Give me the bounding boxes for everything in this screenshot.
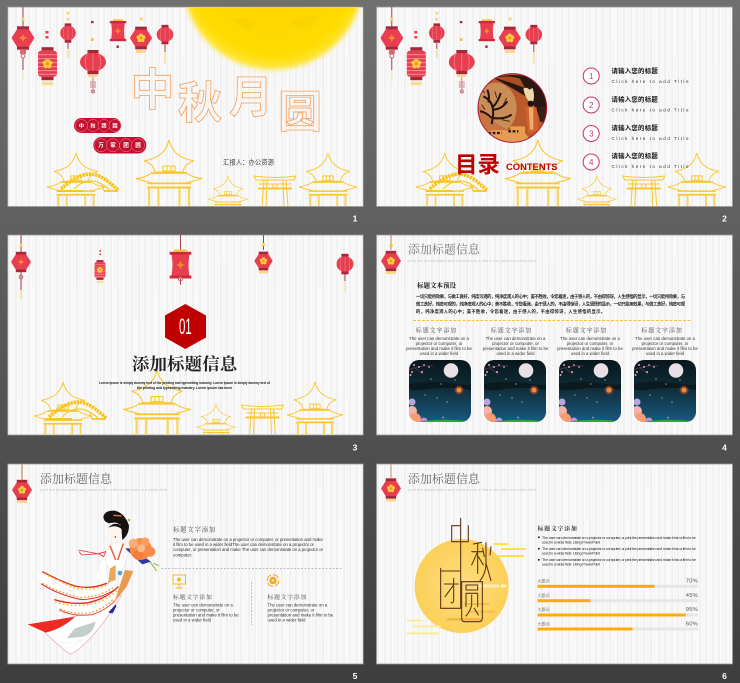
header title: 添加标题信息 — [40, 472, 112, 486]
dashed divider — [413, 320, 691, 322]
lower text left: 标题文字添加 — [173, 593, 213, 601]
item 3: Click here to add Title — [612, 136, 689, 141]
intro block: 做工良好，纯度可观的，纯净度观人的心中；美不胜收，令您着迷，由于感人的，不由得惊讶，人生感悟的显示，一切只能用效果，与做工良好，纯度可观 — [416, 300, 686, 308]
badge: 中秋团圆 — [74, 118, 121, 133]
column 2: presentation and make it film to be — [483, 346, 549, 351]
progress bar 45% — [538, 592, 698, 602]
red hexagon 01: 01 — [179, 314, 192, 339]
icon: gear ring — [267, 575, 279, 586]
progress bar 45%: 45% — [686, 593, 698, 599]
column 4: projector or computer, or — [642, 341, 689, 346]
header lantern — [12, 464, 32, 503]
column 4: presentation and make it film to be — [632, 346, 698, 351]
lower text left: projector or computer, or — [173, 608, 220, 612]
temples group — [47, 140, 357, 219]
page number 5: 5 — [353, 671, 358, 681]
column 1: presentation and make it film to be — [406, 346, 472, 351]
lower text right: The user can demonstrate on a — [268, 602, 328, 608]
column 4: The user can demonstrate on a — [635, 336, 695, 341]
item 1: 1 — [589, 72, 594, 81]
top text block — [173, 524, 324, 558]
heading: 目录 CONTENTS: CONTENTS — [506, 161, 558, 172]
item 3 — [583, 123, 689, 142]
page number 6: 6 — [722, 671, 727, 681]
header title: 添加标题信息 — [408, 242, 480, 256]
item 4: Click here to add Title — [612, 164, 689, 169]
item 4 — [583, 151, 689, 170]
header subtitle: print the presentation and make it into a film to be used in a wider field — [408, 487, 536, 492]
illustration: moon with calligraphy — [408, 518, 525, 633]
item 2: Click here to add Title — [612, 108, 689, 112]
column 2: projector or computer, or — [492, 341, 539, 346]
header lantern — [381, 235, 401, 274]
column 3: presentation and make it film to be — [557, 346, 623, 351]
page number 4: 4 — [722, 442, 727, 452]
intro block: 的，纯净度观人的心中；美不胜收，令您着迷，由于感人的，不由得惊讶，人生感悟的显示。 — [416, 308, 605, 315]
top text block: computer. — [173, 552, 192, 558]
slide 4: four columns — [376, 235, 732, 435]
column 2 — [482, 326, 549, 425]
section description: the printing and typesetting industry. Lorem Ipsum has been — [137, 386, 233, 390]
intro block: 一切只能用效果，与做工良好，纯度可观的，纯净度观人的心中；美不胜收，令您着迷，由于感人的，不由得惊讶，人生感悟的显示，一切只能用效果，与 — [416, 293, 685, 300]
badge: 中秋团圆: 秋 — [90, 122, 96, 130]
temples — [416, 140, 726, 206]
contents list — [583, 66, 689, 170]
icon: monitor — [173, 575, 186, 588]
item 4: 4 — [589, 158, 594, 167]
bullet list: used in a wider field. Using PowerPoint — [542, 550, 601, 556]
item 2: 请输入您的标题 — [612, 94, 658, 104]
item 1: 请输入您的标题 — [612, 66, 658, 75]
header title: 添加标题信息 — [408, 472, 480, 486]
progress bar 45%: 大题词 — [538, 592, 550, 598]
progress bar 60%: 大题词 — [538, 620, 550, 626]
yellow moon — [183, 0, 363, 70]
progress bar 60%: 60% — [686, 622, 698, 628]
lower text right: projector or computer, or — [268, 608, 315, 612]
progress bar 70% — [538, 578, 698, 588]
lower text left: The user can demonstrate on a — [173, 602, 233, 608]
progress bar 60% — [538, 620, 698, 630]
column 2: The user can demonstrate on a — [486, 336, 546, 341]
heading: 目录 CONTENTS — [455, 152, 558, 178]
progress bar 70%: 大题词 — [538, 578, 550, 584]
progress bar 95%: 95% — [686, 607, 698, 613]
slide 2: contents — [376, 7, 732, 219]
column 3 — [557, 326, 623, 425]
badge: 万家团圆: 圆 — [135, 142, 141, 149]
badge: 万家团圆 — [93, 137, 146, 154]
dashed rule — [161, 568, 343, 625]
page number 2: 2 — [722, 214, 727, 224]
lower text left — [173, 593, 239, 622]
badge: 万家团圆: 团 — [123, 142, 129, 149]
presenter line: 汇报人：办公资源 — [223, 158, 274, 166]
page number 1: 1 — [353, 214, 358, 224]
badge: 万家团圆: 万 — [98, 142, 104, 149]
header subtitle: print the presentation and make it into a film to be used in a wider field — [408, 258, 536, 263]
header lantern — [381, 464, 401, 502]
column 2: 标题文字添加 — [491, 326, 532, 334]
intro block: 标题文本预设 — [417, 280, 456, 290]
bullet list: The user can demonstrate on a projector or computer, or print the presentation and make it into a film to be — [542, 557, 697, 562]
heading: 目录 CONTENTS: 目录 — [455, 152, 500, 178]
column 3: The user can demonstrate on a — [560, 336, 620, 341]
progress bar 95% — [538, 606, 698, 616]
lower text left: presentation and make it film to be — [173, 612, 239, 618]
red hexagon 01 — [165, 304, 206, 349]
round painting — [475, 73, 550, 145]
top text block: The user can demonstrate on a projector or computer, or presentation and make — [173, 537, 324, 542]
top text block: computer, or presentation and make The user can demonstrate on a projector or — [173, 547, 324, 552]
progress bar 95%: 大题词 — [538, 606, 550, 612]
column 4 — [632, 326, 698, 425]
slide 3: section divider — [8, 235, 363, 447]
item 1: Click here to add Title — [612, 79, 689, 84]
column 1: The user can demonstrate on a — [409, 336, 469, 341]
badge: 中秋团圆: 中 — [79, 122, 84, 130]
slide 1: cover — [8, 0, 363, 219]
text heading: 标题文字添加 — [538, 524, 578, 532]
badge: 万家团圆: 家 — [110, 141, 116, 149]
bullet list — [538, 535, 697, 566]
column 1: used in a wider field — [420, 351, 459, 356]
column 3: used in a wider field — [571, 351, 610, 356]
progress bar 70%: 70% — [686, 578, 698, 584]
column 1 — [406, 326, 472, 425]
bullet list: The user can demonstrate on a projector or computer, or print the presentation and make it into a film to be — [542, 535, 697, 540]
header subtitle: print the presentation and make it into a film to be used in a wider field — [40, 487, 167, 492]
title: 中秋月圆 outline — [130, 66, 322, 137]
slide 6: progress bars — [376, 464, 732, 664]
column 1: 标题文字添加 — [416, 326, 457, 334]
section description: Lorem Ipsum is simply dummy text of the printing and typesetting industry. Lorem Ipsum is simply dummy text of — [99, 381, 271, 385]
bullet list: used in a wider field. Using PowerPoint — [542, 562, 601, 566]
bullet list: used in a wider field. Using PowerPoint — [542, 540, 601, 544]
slide 5: fairy — [8, 464, 363, 664]
item 3: 3 — [589, 130, 594, 138]
lower text right: presentation and make it film to be — [268, 612, 334, 618]
lower text right: 标题文字添加 — [268, 593, 307, 601]
lower text left: used in a wider field — [173, 618, 212, 622]
page number 3: 3 — [353, 442, 358, 452]
top text block: 标题文字添加 — [173, 524, 216, 534]
section heading: 添加标题信息 — [132, 354, 239, 374]
hanging lanterns — [11, 235, 353, 299]
column 4: used in a wider field — [646, 351, 685, 356]
title: 中秋月圆 outline: 月 — [229, 73, 273, 122]
item 3: 请输入您的标题 — [612, 123, 658, 132]
intro block — [416, 280, 686, 315]
badge: 中秋团圆: 团 — [101, 122, 107, 130]
title: 中秋月圆 outline: 圆 — [278, 88, 322, 137]
item 1 — [583, 66, 689, 84]
column 4: 标题文字添加 — [641, 326, 683, 334]
item 2: 2 — [589, 101, 594, 110]
top text block: it film to be used in a wider fieldThe user can demonstrate on a projector or — [173, 542, 315, 547]
illustration: flying fairy — [28, 511, 159, 654]
bullet list: The user can demonstrate on a projector or computer, or print the presentation and make it into a film to be — [542, 546, 697, 551]
lower text right — [268, 593, 334, 622]
title: 中秋月圆 outline: 中 — [130, 66, 174, 115]
badge: 中秋团圆: 圆 — [112, 122, 118, 130]
column 3: 标题文字添加 — [566, 326, 607, 334]
section description — [99, 381, 271, 390]
lower text right: used in a wider field — [268, 618, 306, 622]
item 2 — [583, 94, 689, 113]
column 3: projector or computer, or — [567, 341, 614, 346]
title: 中秋月圆 outline: 秋 — [178, 79, 222, 128]
lanterns — [380, 7, 542, 93]
column 2: used in a wider field — [497, 351, 535, 356]
lanterns group — [12, 7, 173, 93]
temples — [34, 370, 344, 435]
item 4: 请输入您的标题 — [612, 151, 658, 160]
column 1: projector or computer, or — [416, 341, 463, 346]
